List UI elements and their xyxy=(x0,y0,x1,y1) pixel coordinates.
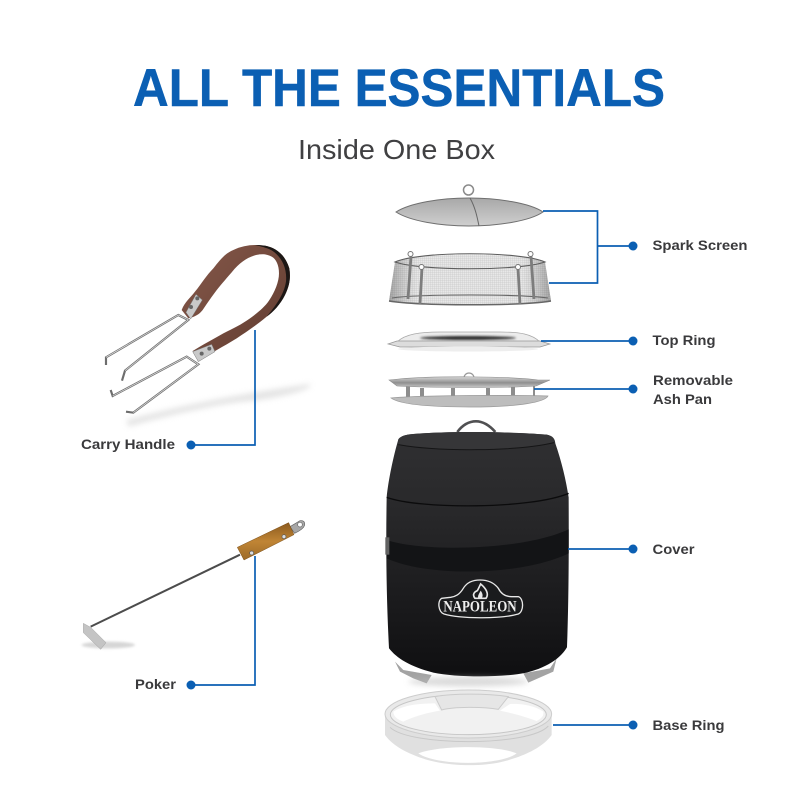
callout: top ring: Top Ring xyxy=(652,332,716,348)
icon: removable ash pan xyxy=(389,373,550,407)
cover body xyxy=(386,432,569,676)
callout: removable ash pan: Removable xyxy=(653,372,733,388)
icon: top ring xyxy=(388,332,550,352)
title: ALL THE ESSENTIALS xyxy=(133,59,665,118)
callout: poker: Poker xyxy=(135,676,177,692)
icon: spark screen lid xyxy=(396,185,543,226)
callout: carry handle xyxy=(81,330,255,452)
callout: carry handle: Carry Handle xyxy=(81,436,175,452)
subtitle: Inside One Box xyxy=(298,134,495,165)
icon: cover xyxy=(385,421,569,683)
cover strap xyxy=(387,529,569,571)
icon: spark screen mesh xyxy=(389,252,551,305)
callout: spark screen: Spark Screen xyxy=(652,237,748,253)
icon: base ring xyxy=(385,677,552,765)
callout: base ring xyxy=(553,717,724,733)
cover feet xyxy=(395,658,557,683)
cover logo xyxy=(439,580,523,618)
callout: spark screen xyxy=(543,211,748,283)
icon: carry handle xyxy=(106,245,310,427)
cover logo: NAPOLEON xyxy=(443,598,517,615)
callout: cover xyxy=(568,541,695,557)
callout: top ring xyxy=(541,332,716,348)
callout: poker xyxy=(135,556,255,692)
callout: base ring: Base Ring xyxy=(652,717,724,733)
cover handle xyxy=(457,421,495,432)
callout: removable ash pan: Ash Pan xyxy=(653,391,712,407)
icon: poker xyxy=(82,521,305,649)
callout: removable ash pan xyxy=(534,372,733,407)
callout: cover: Cover xyxy=(652,541,695,557)
